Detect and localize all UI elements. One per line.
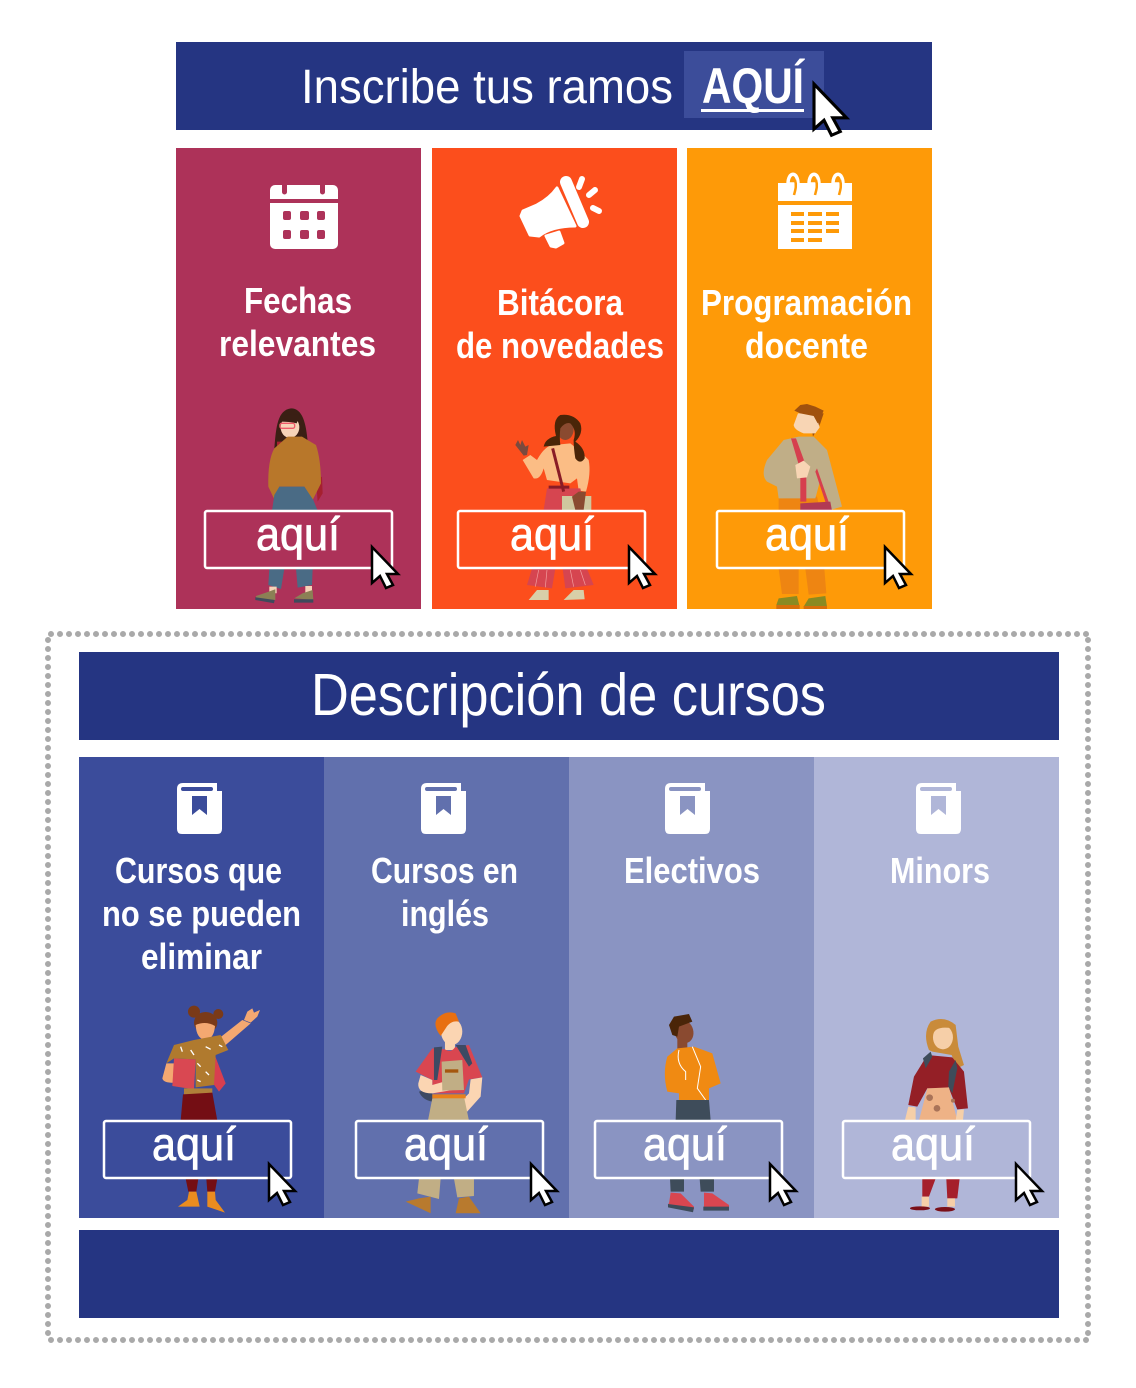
panel: minors xyxy=(814,757,1059,1218)
button: aquí xyxy=(843,1118,1030,1178)
icon: calendar xyxy=(270,185,338,249)
heading: fechas relevantes: relevantes xyxy=(219,323,376,364)
icon: megaphone xyxy=(521,179,599,247)
panel: fechas relevantes xyxy=(176,148,421,609)
button: aquí: aquí xyxy=(765,508,849,560)
button: aquí: aquí xyxy=(510,508,594,560)
top banner xyxy=(176,42,932,130)
heading: programación docente: Programación xyxy=(701,282,912,323)
heading: electivos: Electivos xyxy=(624,850,760,891)
icon: book xyxy=(916,783,961,834)
heading: bitácora de novedades: Bitácora xyxy=(497,282,624,323)
icon: cursor xyxy=(770,1164,796,1205)
heading: minors: Minors xyxy=(890,850,990,891)
button: aquí xyxy=(356,1118,543,1178)
icon: cursor xyxy=(531,1164,557,1205)
character: boy with shirt xyxy=(764,404,842,609)
icon: cursor xyxy=(1016,1164,1042,1205)
icon: cursor xyxy=(885,547,911,588)
heading: fechas relevantes: Fechas xyxy=(244,280,352,321)
heading: cursos en inglés: Cursos en xyxy=(371,850,518,891)
heading: cursos que no se pueden eliminar: no se pueden xyxy=(102,893,301,934)
button: aquí xyxy=(458,508,645,568)
character: girl with buns xyxy=(162,1006,260,1213)
top banner: Inscribe tus ramos xyxy=(301,61,673,114)
panel: programación docente xyxy=(687,148,932,609)
button: aquí: aquí xyxy=(152,1118,236,1170)
banner: descripción de cursos: Descripción de cursos xyxy=(311,662,826,728)
heading: programación docente: docente xyxy=(745,325,868,366)
panel: electivos xyxy=(569,757,814,1218)
character: girl with braid xyxy=(905,1019,968,1212)
icon: cursor xyxy=(629,547,655,588)
button: aquí: aquí xyxy=(404,1118,488,1170)
panel: cursos en inglés xyxy=(324,757,569,1218)
top banner: AQUÍ xyxy=(702,58,805,114)
character: girl with glasses xyxy=(255,408,323,603)
character: waving girl xyxy=(515,415,594,600)
icon: cursor xyxy=(372,547,398,588)
icon: book xyxy=(177,783,222,834)
panel: cursos que no se pueden eliminar xyxy=(79,757,324,1218)
dotted frame xyxy=(48,634,1088,1340)
heading: cursos en inglés: inglés xyxy=(401,893,489,934)
button: aquí: aquí xyxy=(891,1118,975,1170)
heading: bitácora de novedades: de novedades xyxy=(456,325,664,366)
icon: planner xyxy=(778,174,852,249)
button: aquí xyxy=(595,1118,782,1178)
button: aquí xyxy=(104,1118,291,1178)
button: aquí xyxy=(717,508,904,568)
bottom banner xyxy=(79,1230,1059,1318)
heading: cursos que no se pueden eliminar: Cursos que xyxy=(115,850,282,891)
icon: large cursor xyxy=(814,84,846,135)
icon: cursor xyxy=(269,1164,295,1205)
button: aquí: aquí xyxy=(643,1118,727,1170)
character: boy arms crossed xyxy=(665,1014,729,1212)
character: red-haired boy xyxy=(406,1012,482,1213)
icon: book xyxy=(665,783,710,834)
button: aquí xyxy=(205,508,392,568)
panel: bitácora de novedades xyxy=(432,148,677,609)
heading: cursos que no se pueden eliminar: eliminar xyxy=(141,936,262,977)
icon: book xyxy=(421,783,466,834)
button: aquí: aquí xyxy=(256,508,340,560)
banner: descripción de cursos xyxy=(79,652,1059,740)
